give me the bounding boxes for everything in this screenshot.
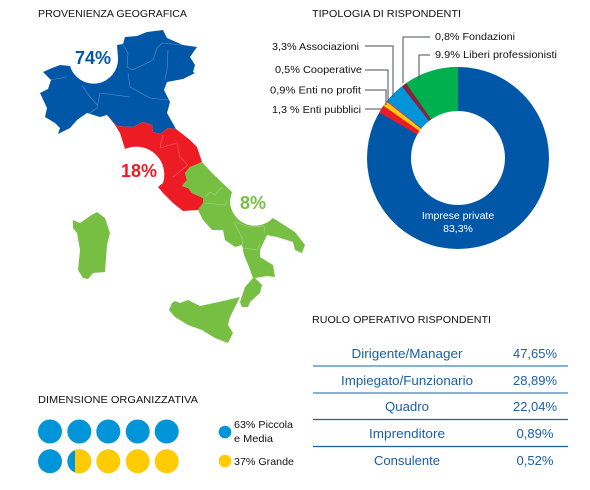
row: Quadro xyxy=(385,399,557,414)
row: Consulente xyxy=(374,453,554,468)
row: Consulente: Consulente xyxy=(374,453,440,468)
row: Dirigente/Manager xyxy=(352,346,557,361)
row: Impiegato/Funzionario: 28,89% xyxy=(513,373,557,388)
map: southern Italy mainland, green xyxy=(182,162,305,307)
row: Impiegato/Funzionario xyxy=(341,373,557,388)
legend: piccola e media xyxy=(219,419,293,445)
map: central Italy, red xyxy=(107,115,203,211)
row: Quadro: 22,04% xyxy=(513,399,557,414)
label: Associazioni: 3,3% Associazioni xyxy=(272,41,359,53)
panel: dimensione organizzativa xyxy=(38,394,294,473)
row: Dirigente/Manager: Dirigente/Manager xyxy=(352,346,463,361)
row: Dirigente/Manager: 47,65% xyxy=(513,346,557,361)
row: Impiegato/Funzionario: Impiegato/Funzionario xyxy=(341,373,473,388)
label: Enti no profit: 0,9% Enti no profit xyxy=(270,84,361,96)
map: Sicily, green xyxy=(169,297,240,343)
heading: ruolo operativo rispondenti: RUOLO OPERATIVO RISPONDENTI xyxy=(312,314,491,326)
leader lines xyxy=(365,37,430,109)
label: Enti pubblici: 1,3 % Enti pubblici xyxy=(272,104,361,116)
map: northern Italy, blue xyxy=(40,30,202,134)
heading: provenienza geografica: PROVENIENZA GEOGRAFICA xyxy=(38,8,187,20)
row: Quadro: Quadro xyxy=(385,399,429,414)
legend: piccola e media: 63% Piccola xyxy=(234,419,293,431)
heading: tipologia di rispondenti: TIPOLOGIA DI RISPONDENTI xyxy=(312,8,461,20)
row: Consulente: 0,52% xyxy=(516,453,554,468)
map: Sardinia, green xyxy=(73,212,110,279)
row: Imprenditore: Imprenditore xyxy=(369,426,445,441)
label: Imprese private: Imprese private xyxy=(422,210,494,222)
label: Cooperative: 0,5% Cooperative xyxy=(275,64,362,76)
label: Fondazioni: 0,8% Fondazioni xyxy=(435,31,515,43)
donut chart xyxy=(367,67,549,249)
label: 8%: 8% xyxy=(240,193,266,213)
label: 74%: 74% xyxy=(75,48,111,68)
heading: dimensione organizzativa: DIMENSIONE ORGANIZZATIVA xyxy=(38,394,198,406)
legend: grande: 37% Grande xyxy=(234,456,294,468)
label: Liberi professionisti: 9.9% Liberi professionisti xyxy=(435,49,557,61)
panel: ruolo operativo rispondenti xyxy=(312,314,568,468)
legend: piccola e media: e Media xyxy=(234,433,273,445)
pictogram: ten circles xyxy=(38,420,179,473)
label: 18%: 18% xyxy=(121,161,157,181)
panel: tipologia di rispondenti xyxy=(270,8,557,249)
label: 83,3%: 83,3% xyxy=(443,223,473,235)
row: Imprenditore: 0,89% xyxy=(516,426,554,441)
row: Imprenditore xyxy=(369,426,554,441)
panel: provenienza geografica xyxy=(38,8,305,343)
